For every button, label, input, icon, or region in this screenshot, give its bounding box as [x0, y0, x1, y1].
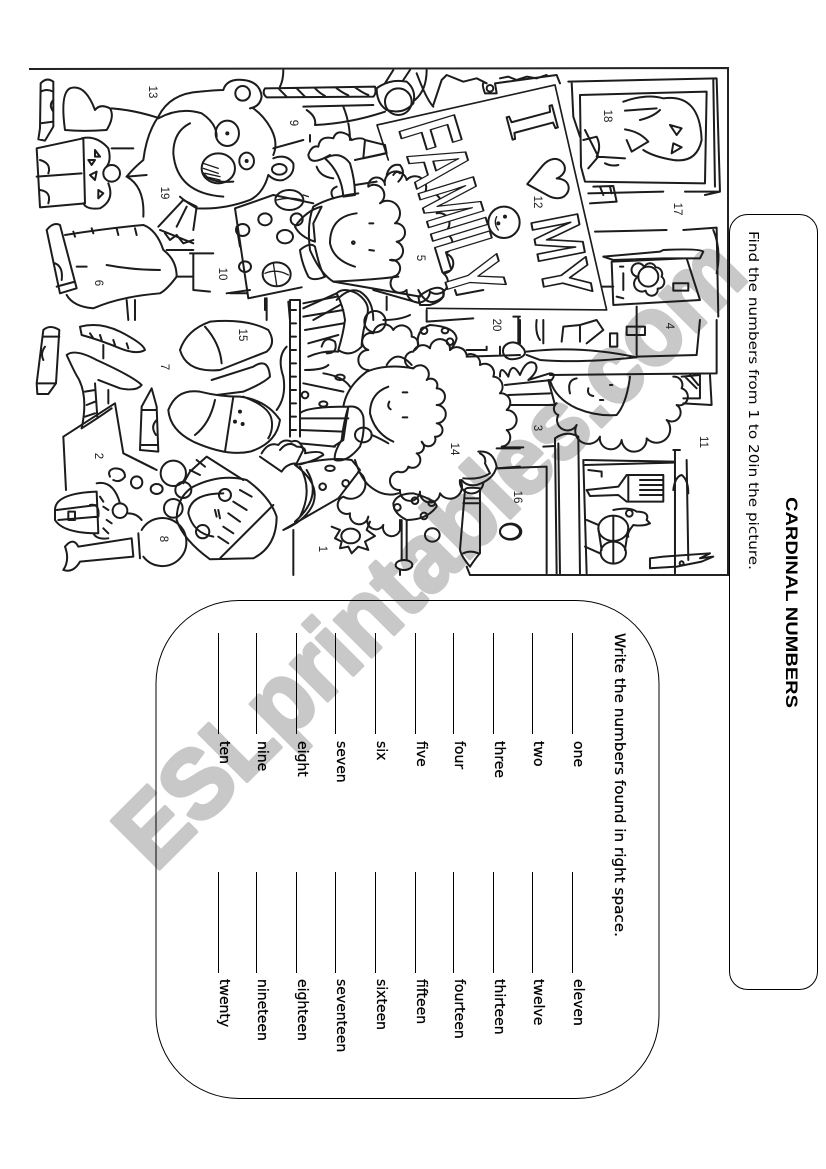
- hidden numbers: 9: [287, 120, 299, 126]
- answer column 1 to 10: one: [570, 741, 586, 767]
- hand and lower frame: [682, 375, 712, 405]
- hair bows: [295, 207, 325, 279]
- icon: high heels: [67, 325, 145, 428]
- icon: bone: [63, 533, 140, 571]
- answer column 11 to 20: twenty: [216, 979, 232, 1027]
- watermark: ESLprintables.com: [92, 215, 765, 888]
- lower right scene: [498, 320, 717, 573]
- hidden numbers: 17: [671, 203, 683, 215]
- big hair with number 14: [390, 339, 517, 503]
- girl with dress: [230, 70, 453, 310]
- icon: mitten and crayon: [47, 224, 177, 320]
- instruction: Find the numbers from 1 to 20in the picture.: [745, 231, 760, 570]
- answer column 11 to 20: nineteen: [254, 979, 270, 1041]
- arm band and bush: [308, 132, 387, 198]
- paper 2: [63, 403, 153, 490]
- ball and dots: [142, 518, 186, 566]
- second woman hair: [550, 377, 688, 452]
- icon: cupcake lower: [300, 406, 388, 461]
- answer column 1 to 10: ten: [216, 741, 232, 764]
- icon: paint brush: [587, 475, 663, 502]
- hidden numbers: 13: [146, 86, 158, 98]
- hidden numbers: 3: [531, 425, 543, 431]
- sign text: [381, 99, 606, 307]
- woman head and face: [343, 366, 413, 495]
- icon: crayon top left: [38, 80, 53, 141]
- hidden numbers: 11: [697, 436, 709, 448]
- answer column 1 to 10: [216, 633, 586, 783]
- icon: teddy bear: [127, 80, 294, 217]
- answer column 11 to 20: thirteen: [491, 979, 507, 1035]
- arm and dress: [280, 444, 360, 530]
- top connecting lines: [373, 290, 520, 357]
- hidden numbers: 6: [92, 280, 104, 286]
- hair with number 5: [368, 171, 453, 305]
- dress: [230, 195, 420, 310]
- back hair: [338, 324, 418, 536]
- instruction: Write the numbers found in right space.: [611, 633, 627, 937]
- picture frame with portrait: [568, 78, 720, 203]
- sign text: ♥: [510, 150, 582, 211]
- hidden numbers: 19: [158, 187, 170, 199]
- flower on stem: [503, 342, 525, 359]
- hidden numbers: 16: [511, 491, 523, 503]
- answer column 11 to 20: fifteen: [413, 979, 429, 1024]
- right room: [583, 450, 688, 573]
- icon: small fork tool: [650, 553, 713, 568]
- answer column 11 to 20: seventeen: [333, 979, 349, 1052]
- hidden numbers: 2: [92, 453, 104, 459]
- door: [555, 434, 580, 573]
- hidden numbers: [92, 86, 709, 552]
- picture frame: [29, 68, 728, 575]
- frame bottom and carrot: [520, 320, 717, 375]
- hidden numbers: 1: [316, 546, 328, 552]
- hidden numbers: 15: [236, 329, 248, 341]
- icon: cupcake bottom: [55, 483, 142, 539]
- answer column 1 to 10: seven: [333, 741, 349, 783]
- headband: [462, 448, 520, 485]
- answer column 11 to 20: eighteen: [294, 979, 310, 1041]
- hidden numbers: 18: [601, 110, 613, 122]
- panel: write the numbers: [156, 600, 659, 1098]
- sign text: I: [491, 99, 574, 146]
- answer column 1 to 10: four: [451, 741, 467, 769]
- icon: crayon far left: [37, 327, 59, 394]
- hidden numbers: 14: [448, 443, 460, 456]
- hand and wall curve: [260, 347, 303, 472]
- icon: cupcake left: [37, 138, 147, 209]
- answer column 11 to 20: eleven: [570, 979, 586, 1026]
- hidden numbers: 4: [663, 323, 675, 330]
- dot on floor: [500, 524, 521, 540]
- hidden numbers: 5: [414, 255, 426, 261]
- shirt stripes: [303, 351, 350, 392]
- shelf wall frame with flower picture: [595, 228, 719, 320]
- hidden numbers: 8: [157, 536, 169, 542]
- hidden numbers: 12: [531, 196, 543, 208]
- torn paper behind sign: [433, 75, 560, 105]
- door side lines: [498, 446, 555, 573]
- answer column 11 to 20: sixteen: [373, 979, 389, 1030]
- icon: jar and toy: [585, 509, 650, 553]
- hair bows: [393, 325, 457, 520]
- answer column 1 to 10: eight: [294, 741, 310, 777]
- cupcake top: [288, 290, 373, 320]
- potted plant: [500, 362, 555, 405]
- icon: pole and floor dot: [293, 520, 520, 575]
- icon: pencil: [460, 488, 480, 575]
- sign text: MY: [516, 208, 606, 304]
- sign post and frame 10: [158, 200, 267, 320]
- icon: slippers: [168, 321, 280, 453]
- answer column 11 to 20: [216, 872, 586, 1052]
- icon: cupcake upper: [303, 290, 410, 353]
- hidden numbers: 20: [490, 319, 502, 331]
- answer column 1 to 10: three: [491, 741, 507, 778]
- hidden numbers: 7: [158, 364, 170, 370]
- icon: heart: [63, 88, 157, 131]
- broom and lamp: [264, 70, 433, 148]
- girl head: [309, 193, 398, 282]
- hidden numbers: 10: [216, 268, 228, 280]
- lower left scene: [37, 321, 303, 571]
- answer column 1 to 10: two: [530, 741, 546, 767]
- answer column 11 to 20: twelve: [530, 979, 546, 1025]
- icon: boy with ball: [161, 457, 277, 559]
- ruler: [290, 300, 300, 437]
- sign text: FAMILY: [381, 106, 523, 307]
- upper right scene: [377, 75, 720, 320]
- upper left scene: [37, 80, 373, 320]
- panel: picture: [29, 68, 728, 575]
- answer column 1 to 10: five: [413, 741, 429, 767]
- woman with big hair: [280, 290, 520, 575]
- answer column 1 to 10: six: [373, 741, 389, 760]
- sign: [377, 85, 607, 310]
- answer column 11 to 20: fourteen: [451, 979, 467, 1039]
- heading: CARDINAL NUMBERS: [782, 497, 800, 708]
- icon: sun: [332, 522, 375, 553]
- answer column 1 to 10: nine: [254, 741, 270, 771]
- icon: crayon middle: [140, 388, 158, 452]
- panel: header box: [730, 214, 818, 990]
